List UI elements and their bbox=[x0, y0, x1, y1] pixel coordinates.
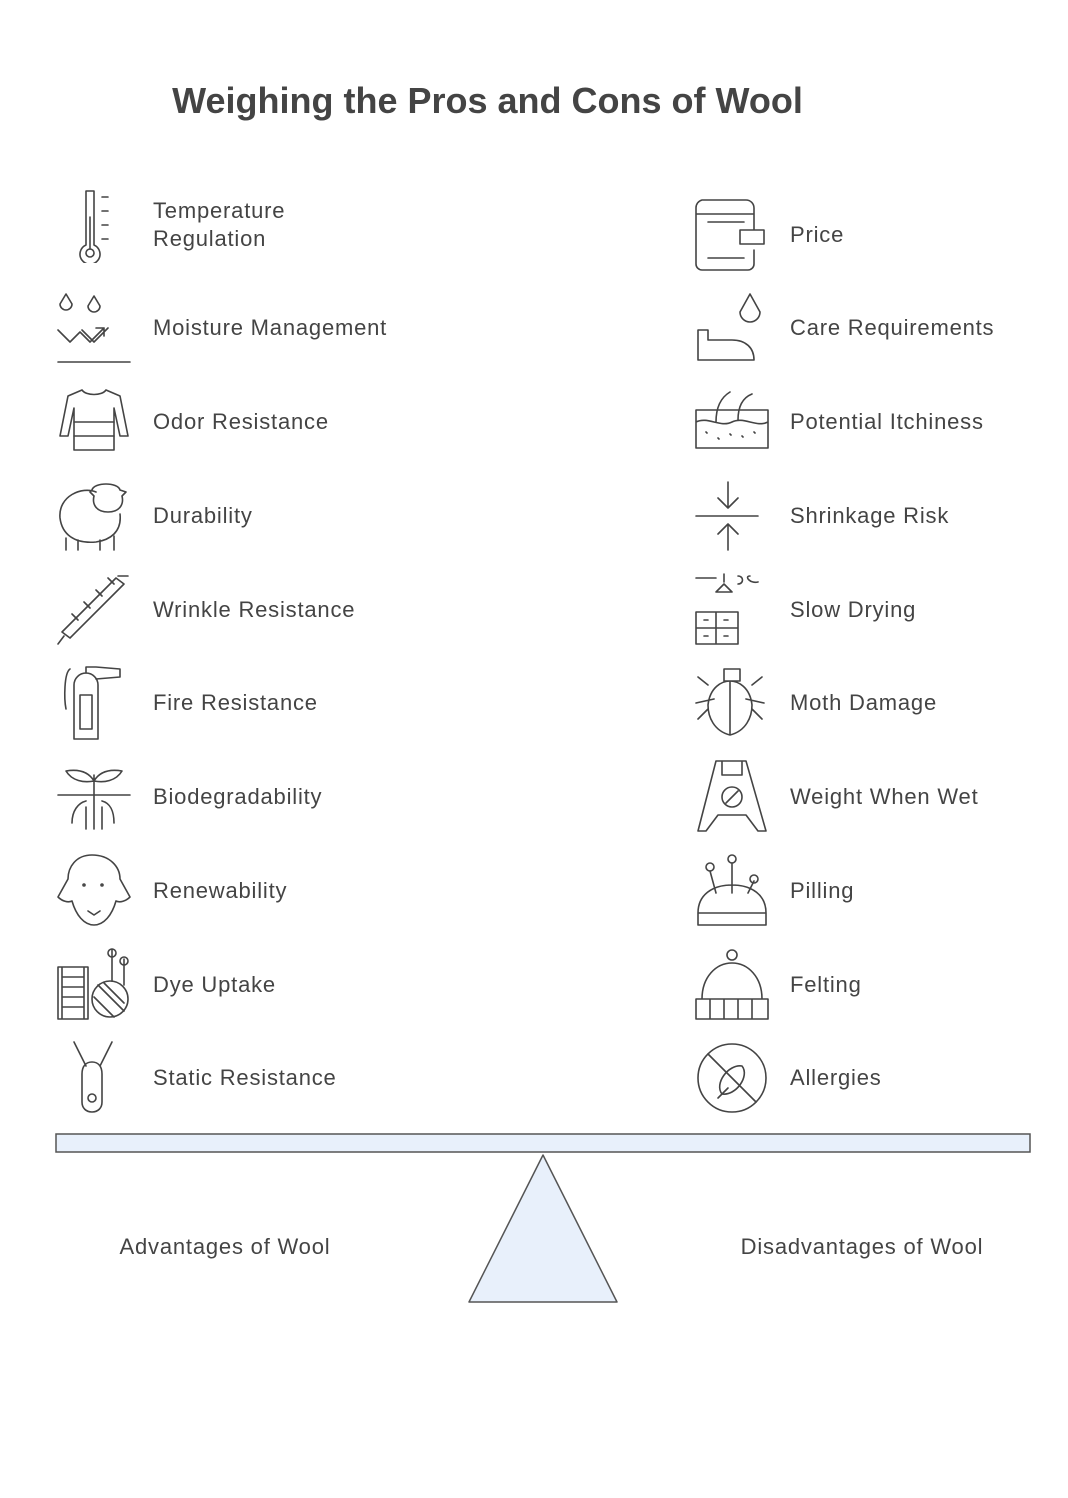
text: weight: Weight When Wet bbox=[790, 784, 978, 809]
text: temperature regulation: Temperature bbox=[153, 198, 285, 223]
icon: beanie bbox=[695, 949, 769, 1020]
icon: drying bbox=[695, 573, 759, 645]
icon: sweater bbox=[59, 389, 129, 451]
text: renewability: Renewability bbox=[153, 878, 287, 903]
text: wrinkle: Wrinkle Resistance bbox=[153, 597, 355, 622]
icon: wallet bbox=[695, 199, 765, 271]
label: disadvantages: Disadvantages of Wool bbox=[741, 1234, 983, 1259]
text: temperature regulation bbox=[153, 198, 285, 251]
text: moth: Moth Damage bbox=[790, 690, 937, 715]
text: static: Static Resistance bbox=[153, 1065, 337, 1090]
text: slow drying: Slow Drying bbox=[790, 597, 916, 622]
icon: zipper bbox=[73, 1041, 113, 1113]
text: moisture: Moisture Management bbox=[153, 315, 387, 340]
icon: extinguisher bbox=[64, 666, 121, 740]
text: itchiness: Potential Itchiness bbox=[790, 409, 984, 434]
text: biodegradability: Biodegradability bbox=[153, 784, 322, 809]
title: Weighing the Pros and Cons of Wool bbox=[172, 80, 803, 121]
text: temperature regulation: Regulation bbox=[153, 226, 266, 251]
icon: sheep face bbox=[57, 854, 131, 926]
icon: moth bbox=[695, 668, 765, 736]
text: pilling: Pilling bbox=[790, 878, 854, 903]
balance scale bbox=[55, 1133, 1031, 1303]
icon: shrink bbox=[695, 481, 759, 551]
icon: sprout bbox=[57, 770, 131, 830]
text: durability: Durability bbox=[153, 503, 253, 528]
text: care: Care Requirements bbox=[790, 315, 994, 340]
text: fire: Fire Resistance bbox=[153, 690, 318, 715]
text: price: Price bbox=[790, 222, 844, 247]
icon: tape bbox=[57, 575, 129, 645]
icon: pin cushion bbox=[697, 854, 767, 926]
icon: thermometer bbox=[79, 190, 109, 263]
icon: moisture bbox=[57, 293, 131, 363]
icon: yarn bbox=[57, 948, 129, 1020]
text: felting: Felting bbox=[790, 972, 862, 997]
icon: iron bbox=[697, 293, 761, 361]
icon: skin bbox=[695, 391, 769, 449]
text: allergies: Allergies bbox=[790, 1065, 882, 1090]
text: dye uptake: Dye Uptake bbox=[153, 972, 276, 997]
icon: wet floor sign bbox=[697, 760, 767, 832]
icon: sheep bbox=[59, 483, 127, 551]
label: advantages: Advantages of Wool bbox=[120, 1234, 330, 1259]
icon: allergy bbox=[697, 1043, 767, 1113]
text: shrinkage: Shrinkage Risk bbox=[790, 503, 949, 528]
text: odor: Odor Resistance bbox=[153, 409, 329, 434]
